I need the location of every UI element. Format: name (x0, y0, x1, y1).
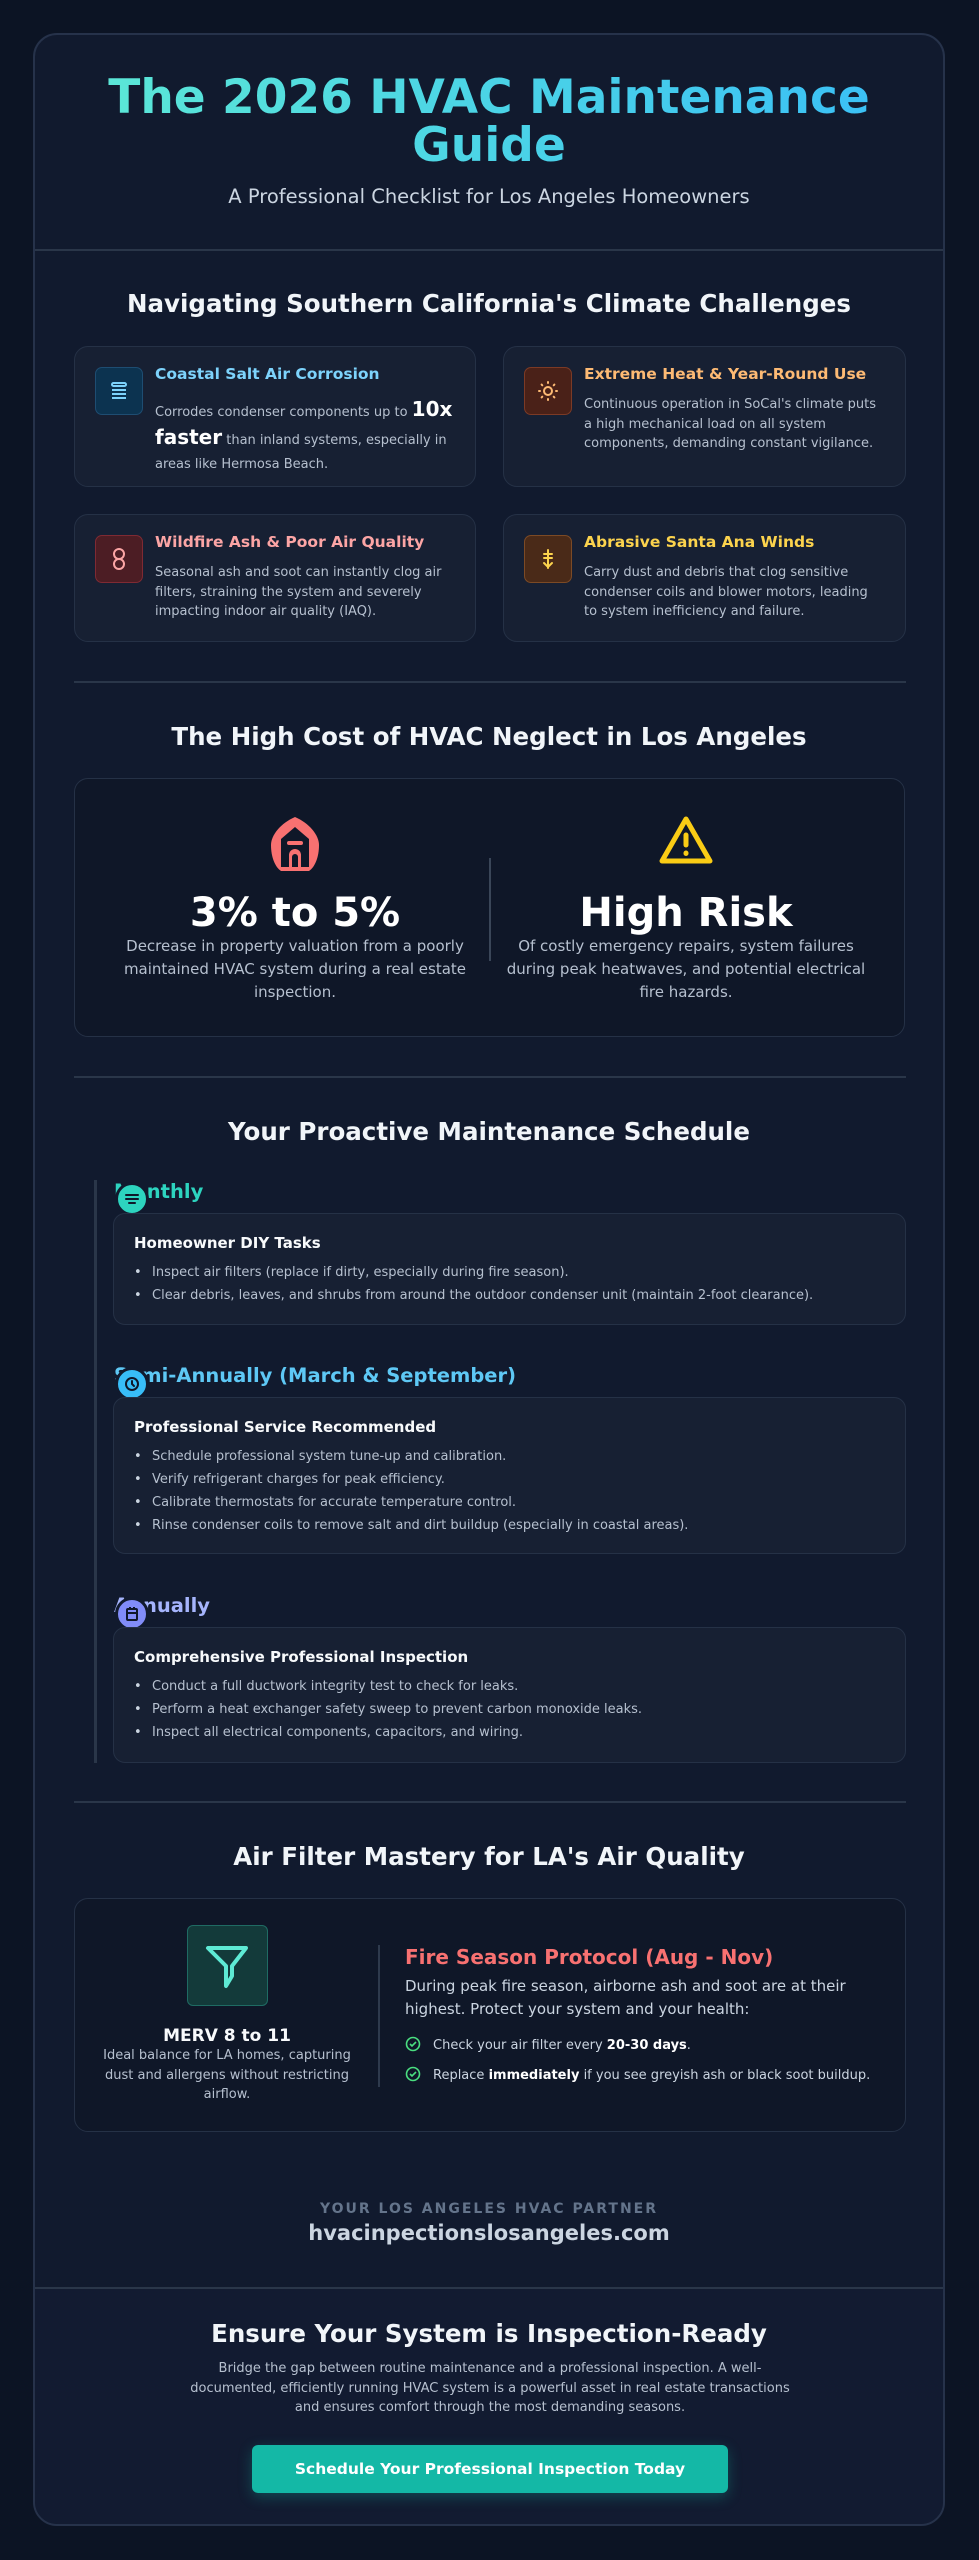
subtitle: A Professional Checklist for Los Angeles Homeowners (228, 185, 750, 208)
card: wildfire ash (74, 514, 476, 642)
icon: monthly dot (115, 1182, 149, 1216)
stat: property valuation: Decrease in property valuation from a poorly maintained HVAC system during a real estate inspection. (124, 937, 466, 1001)
icon: house (271, 817, 319, 871)
card: santa ana winds: Carry dust and debris that clog sensitive condenser coils and blower motors, leading to system inefficiency and failure. (584, 565, 868, 619)
timeline: semi-annually (113, 1364, 906, 1554)
title: The 2026 HVAC Maintenance (108, 70, 870, 125)
card: coastal salt (74, 346, 476, 487)
MERV block (103, 1925, 351, 2102)
icon: calendar dot (115, 1597, 149, 1631)
title (33, 74, 945, 170)
card: DIY tasks (113, 1213, 906, 1325)
card: extreme heat: Continuous operation in SoCal's climate puts a high mechanical load on all system components, demanding constant vigilance. (584, 397, 876, 451)
fire season protocol: Fire Season Protocol (Aug - Nov) (405, 1945, 773, 1969)
stat: high risk (507, 816, 865, 1001)
panel: cost stats (74, 778, 905, 1037)
card: comprehensive inspection: Inspect all electrical components, capacitors, and wiring. (152, 1725, 523, 1740)
partner tagline: YOUR LOS ANGELES HVAC PARTNER (320, 2201, 658, 2217)
title: Guide (412, 118, 566, 173)
stat: high risk: Of costly emergency repairs, system failures during peak heatwaves, and potential electrical fire hazards. (507, 937, 865, 1001)
card: santa ana winds (503, 514, 906, 642)
timeline: annually (113, 1594, 906, 1763)
timeline: semi-annually: Semi-Annually (March & September) (114, 1364, 516, 1387)
card: DIY tasks: Clear debris, leaves, and shrubs from around the outdoor condenser unit (maintain 2-foot clearance). (152, 1288, 813, 1303)
card: DIY tasks: Inspect air filters (replace if dirty, especially during fire season). (152, 1265, 569, 1280)
card: comprehensive inspection: Conduct a full ductwork integrity test to check for leaks. (152, 1679, 518, 1694)
card: comprehensive inspection: Comprehensive Professional Inspection (134, 1648, 468, 1666)
card: professional service (113, 1397, 906, 1554)
icon: filter funnel (186, 1925, 268, 2006)
icon: ash (95, 535, 143, 583)
card: coastal salt: Corrodes condenser components up to 10x faster than inland systems, especially in areas like Hermosa Beach. (155, 397, 452, 472)
card: coastal salt: Coastal Salt Air Corrosion (155, 365, 380, 383)
heading: air filter: Air Filter Mastery for LA's Air Quality (233, 1842, 745, 1871)
card: professional service: Calibrate thermostats for accurate temperature control. (152, 1495, 516, 1510)
checklist (406, 2036, 870, 2083)
heading: schedule: Your Proactive Maintenance Schedule (228, 1117, 750, 1146)
timeline line (94, 1180, 97, 1763)
MERV block: Ideal balance for LA homes, capturing dust and allergens without restricting airflow. (103, 2048, 351, 2102)
heading: cost of neglect: The High Cost of HVAC Neglect in Los Angeles (171, 722, 807, 751)
card: DIY tasks: Homeowner DIY Tasks (134, 1234, 321, 1252)
card: extreme heat (503, 346, 906, 487)
card: professional service: Professional Service Recommended (134, 1418, 436, 1436)
CTA button: Schedule Your Professional Inspection Today (295, 2460, 685, 2478)
fire season protocol (405, 1945, 870, 2083)
card: comprehensive inspection: Perform a heat exchanger safety sweep to prevent carbon monoxide leaks. (152, 1702, 642, 1717)
card: santa ana winds: Abrasive Santa Ana Winds (584, 533, 814, 551)
fire season protocol: During peak fire season, airborne ash and soot are at their highest. Protect your system and your health: (405, 1977, 846, 2018)
card: wildfire ash: Seasonal ash and soot can instantly clog air filters, straining the system and severely impacting indoor air quality (IAQ). (155, 565, 441, 619)
icon: wind (524, 535, 572, 583)
heading: climate challenges: Navigating Southern California's Climate Challenges (127, 289, 851, 318)
icon: sun (524, 367, 572, 415)
icon: salt layers (95, 367, 143, 415)
stat: property valuation (124, 817, 466, 1001)
footer text: Bridge the gap between routine maintenance and a professional inspection. A well-documented, efficiently running HVAC system is a powerful asset in real estate transactions and ensures comfort through the most demanding seasons. (190, 2361, 790, 2415)
CTA button (252, 2445, 728, 2493)
stat: property valuation: 3% to 5% (190, 890, 400, 936)
icon: clock dot (115, 1367, 149, 1401)
website url: hvacinpectionslosangeles.com (308, 2221, 670, 2245)
MERV block: MERV 8 to 11 (163, 2026, 291, 2046)
timeline: monthly (113, 1180, 906, 1325)
card: comprehensive inspection (113, 1627, 906, 1763)
timeline: annually: Annually (114, 1594, 210, 1617)
footer heading: Ensure Your System is Inspection-Ready (211, 2319, 767, 2348)
card: professional service: Rinse condenser coils to remove salt and dirt buildup (especially in coastal areas). (152, 1518, 688, 1533)
card: professional service: Schedule professional system tune-up and calibration. (152, 1449, 506, 1464)
stat: high risk: High Risk (579, 890, 793, 936)
footer background (35, 2287, 947, 2528)
card: wildfire ash: Wildfire Ash & Poor Air Quality (155, 533, 424, 551)
card: professional service: Verify refrigerant charges for peak efficiency. (152, 1472, 445, 1487)
timeline: monthly: Monthly (114, 1180, 203, 1203)
card: extreme heat: Extreme Heat & Year-Round Use (584, 365, 866, 383)
panel: air filter (74, 1898, 906, 2132)
checklist: Check your air filter every 20-30 days. (433, 2038, 691, 2053)
checklist: Replace immediately if you see greyish ash or black soot buildup. (433, 2068, 870, 2083)
icon: warning (660, 816, 712, 864)
